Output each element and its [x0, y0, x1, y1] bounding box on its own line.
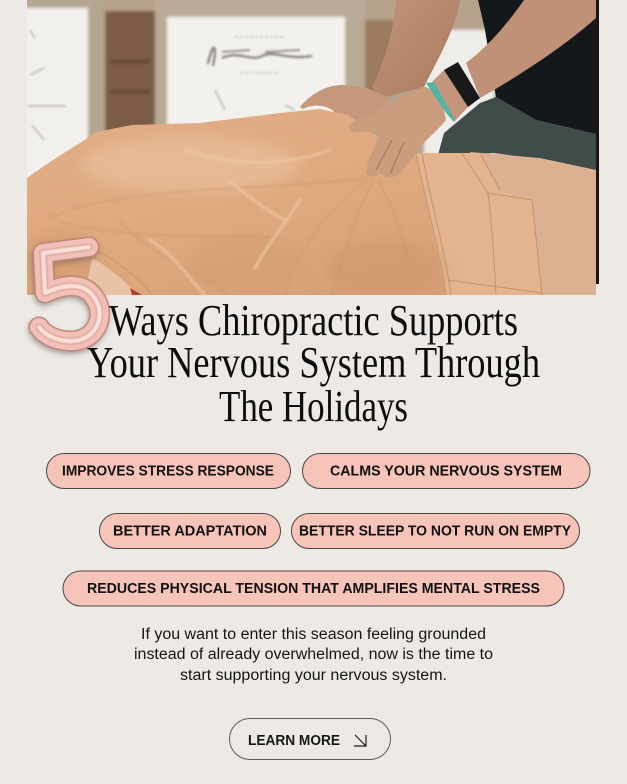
- pill: improves stress response: IMPROVES STRESS RESPONSE: [62, 464, 274, 480]
- photo edge line: [596, 0, 599, 284]
- left hand: [300, 85, 388, 120]
- pill: improves stress response: [46, 454, 290, 488]
- pill: better adaptation: [100, 514, 280, 548]
- pants: [438, 97, 596, 172]
- shirt black: [478, 0, 596, 134]
- fabric folds: [130, 148, 332, 295]
- photo: chiropractor adjusting patient: [20, 0, 605, 300]
- button: learn more: LEARN MORE: [248, 733, 340, 749]
- poster script: [28, 30, 312, 140]
- title: The Holidays: [219, 382, 408, 431]
- right hand: [348, 87, 446, 178]
- body text: If you want to enter this season feeling grounded: [141, 626, 486, 643]
- watch: [444, 62, 480, 107]
- shirt and shorts: [27, 109, 446, 295]
- pill: reduces physical tension: REDUCES PHYSICAL TENSION THAT AMPLIFIES MENTAL STRESS: [87, 581, 540, 597]
- body text: start supporting your nervous system.: [180, 667, 447, 684]
- shorts panel: [416, 153, 542, 295]
- wall and posters: [27, 0, 596, 156]
- wrist: [430, 70, 468, 122]
- pill: better sleep: [292, 514, 580, 548]
- fabric shading: [64, 136, 446, 276]
- body text: instead of already overwhelmed, now is the time to: [134, 646, 493, 663]
- forearm back: [372, 0, 460, 97]
- title: Ways Chiropractic Supports: [109, 296, 518, 345]
- balloon number 5: [38, 247, 100, 344]
- title: [87, 296, 540, 431]
- forearm front: [466, 0, 596, 98]
- body text: [134, 626, 493, 684]
- pill: better sleep: BETTER SLEEP TO NOT RUN ON EMPTY: [299, 524, 571, 540]
- pill: calms your nervous system: [302, 454, 590, 488]
- pill: calms your nervous system: CALMS YOUR NERVOUS SYSTEM: [330, 464, 562, 480]
- button: learn more: [230, 718, 390, 760]
- icon: arrow: [354, 735, 366, 746]
- pill: reduces physical tension: [63, 571, 564, 606]
- patient leg: [470, 152, 596, 295]
- wristband: [426, 82, 454, 122]
- pill: better adaptation: BETTER ADAPTATION: [113, 524, 267, 540]
- hem and skin: [88, 258, 132, 295]
- title: Your Nervous System Through: [87, 338, 540, 387]
